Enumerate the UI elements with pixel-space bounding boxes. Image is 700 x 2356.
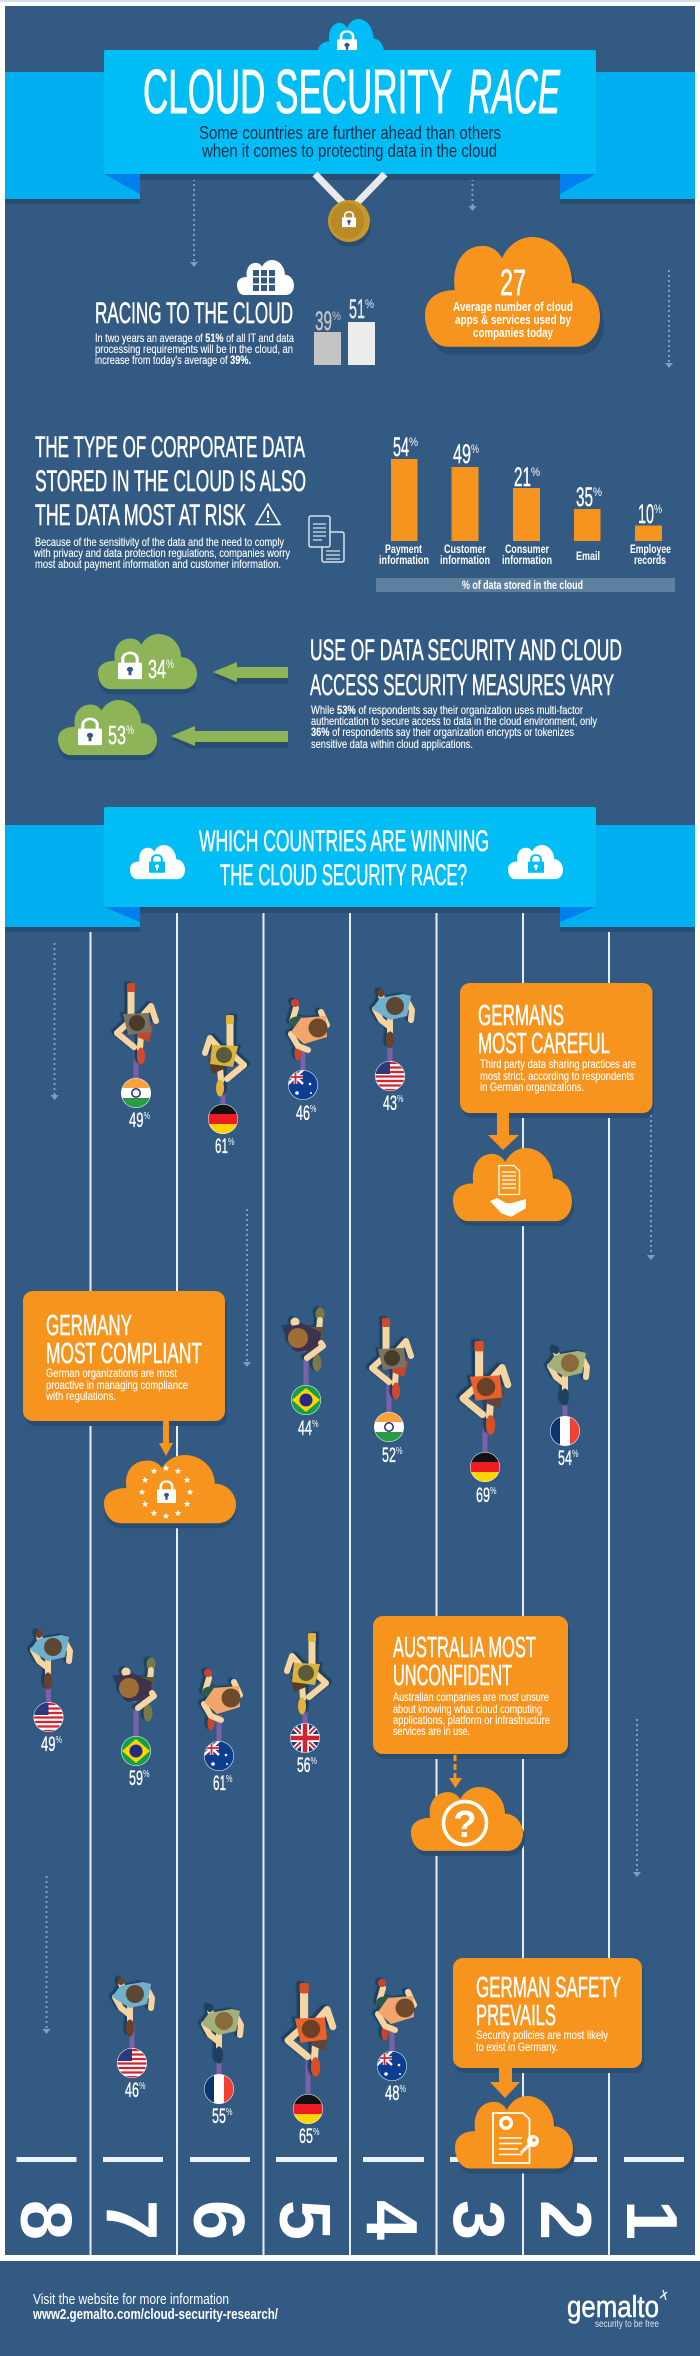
subtitle [199,123,501,161]
icon: cloud lock on banner [318,19,384,66]
lane numbers: 7 [91,2200,171,2240]
runner: Australia 61: 61 [213,1772,226,1795]
runner: USA 49 [30,1630,70,1756]
text block: Because of the sensitivity of the data and the need to comply [35,535,284,549]
bar chart: data stored: 49 [453,439,471,469]
runner: India 52: 52 [382,1444,396,1467]
callout: Germany most compliant: German organizations are most [46,1366,178,1380]
dotted arrows [42,174,673,2034]
arrow [490,2068,520,2098]
callout: German safety prevails: PREVAILS [476,2000,556,2032]
callout: Germany most compliant [23,1291,236,1528]
lane numbers: 5 [264,2200,344,2240]
footer text [32,2291,279,2323]
runner: India 49: % [144,1111,150,1122]
icon: cloud with question mark [411,1787,525,1856]
bar chart: data stored: % [409,435,418,449]
bar chart: 39 vs 51: 51 [349,294,365,324]
bar chart: data stored: % [471,442,479,456]
icon: medal [315,174,385,247]
runner: France 54: 54 [558,1447,572,1470]
runner: Australia 46: % [310,1104,317,1115]
runner: USA 46 [112,1977,152,2102]
banner: which countries [5,807,695,932]
callout: Germans most careful: in German organizations. [480,1080,584,1094]
runner: France 55 [201,2004,241,2128]
heading [310,634,622,702]
callout: Australia most unconfident: UNCONFIDENT [393,1660,512,1692]
runner: France 54 [547,1346,587,1470]
icon: green cloud 53 [58,700,157,760]
lane numbers: 8 [5,2200,85,2240]
callout: 27 average apps cloud: Average number of cloud [453,299,573,314]
bar chart: data stored: 54 [393,432,409,462]
runner: India 49: 49 [129,1109,144,1132]
callout: Australia most unconfident: services are in use. [393,1724,470,1738]
text block: authentication to secure access to data in the cloud environment, only [311,714,597,728]
chart legend [376,578,675,592]
callout: Australia most unconfident [373,1616,570,1856]
icon: cloud with question mark: ? [453,1804,477,1846]
subtitle: Some countries are further ahead than others [199,123,501,143]
runner: Germany 61: 61 [215,1135,228,1158]
runner: Australia 61: % [226,1774,233,1785]
runner: Germany 61 [205,1015,244,1158]
bar chart: data stored: information [440,553,490,567]
runner: India 52: % [396,1446,403,1457]
bar chart: data stored: % [531,465,540,479]
heading [35,431,306,532]
runner: Germany 65: % [313,2127,320,2138]
callout: Germany most compliant: proactive in managing compliance [46,1378,188,1392]
callout: Germans most careful: MOST CAREFUL [478,1028,610,1060]
footer [0,2255,700,2356]
bar chart: data stored: Payment [385,542,422,556]
heading: THE CLOUD SECURITY RACE? [220,859,467,892]
icon: left cloud lock [130,845,185,879]
bar chart: 39 vs 51: 39 [315,306,332,336]
heading: THE DATA MOST AT RISK [35,499,246,532]
bar chart: data stored [376,432,675,592]
text block: with privacy and data protection regulations, companies worry [33,546,290,560]
heading: RACING TO THE CLOUD [95,297,293,330]
lane numbers: 3 [438,2200,518,2240]
runner: Brazil 44 [284,1308,324,1440]
bar chart: data stored: % [654,502,662,516]
runner: India 49 [117,983,156,1132]
arrow: to 53 cloud [171,726,288,750]
heading: STORED IN THE CLOUD IS ALSO [35,465,306,498]
bar chart: 39 vs 51: % [365,297,374,311]
bar chart: data stored: records [634,553,666,567]
callout: 27 average apps cloud [425,237,604,355]
arrow [488,1113,519,1150]
lane numbers: 1 [611,2200,691,2240]
runner: Germany 65: 65 [299,2125,313,2148]
text block: processing requirements will be in the cloud, an [95,342,293,356]
logo: gemalto: gemalto [567,2289,659,2324]
bar chart: 39 vs 51: % [332,309,341,323]
runner: India 52 [372,1318,411,1467]
callout: Germany most compliant: GERMANY [46,1310,132,1342]
runner: USA 49: 49 [41,1733,56,1756]
text block [33,535,290,571]
runner: Germany 69: % [490,1486,497,1497]
runner: Australia 48: 48 [385,2082,400,2105]
icon: right cloud lock [508,845,563,879]
bar chart: data stored: information [502,553,552,567]
logo: gemalto: security to be free [595,2318,659,2330]
icon: green cloud 34 [98,634,197,694]
runner: USA 43 [372,989,412,1115]
bar chart: data stored: Customer [444,542,486,556]
runner: France 55: 55 [212,2105,226,2128]
chart legend: % of data stored in the cloud [462,578,583,592]
bar chart: data stored: % [593,485,602,499]
title: CLOUD SECURITY [143,58,452,127]
text block: While 53% of respondents say their organization uses multi-factor [311,703,583,717]
callout: Australia most unconfident: Australian companies are most unsure [393,1690,549,1704]
heading [199,825,489,892]
runner: Australia 48: % [400,2084,406,2095]
icon: white cloud grid [237,260,294,295]
bar chart: data stored: 35 [576,482,593,512]
heading: THE TYPE OF CORPORATE DATA [35,431,305,464]
subtitle: when it comes to protecting data in the cloud [201,141,497,161]
callout: Germans most careful: GERMANS [478,1000,564,1032]
bar chart: data stored: Consumer [505,542,549,556]
runner: Brazil 44: 44 [298,1417,312,1440]
text block: most about payment information and customer information. [35,557,281,571]
panel: security measures vary [58,634,622,760]
text block: increase from today's average of 39%. [95,353,251,367]
arrow: to 34 cloud [213,662,288,686]
callout: Australia most unconfident: about knowing what cloud computing [393,1702,542,1716]
icon: green cloud 34: 34 [148,654,166,684]
icon: cloud with certificate and key [455,2096,575,2174]
runner: Brazil 44: % [312,1419,319,1430]
icon: green cloud 34: % [166,657,174,671]
header banner [5,19,695,247]
callout: Germans most careful: Third party data sharing practices are [480,1057,636,1071]
runner: France 55: % [226,2107,233,2118]
runner: Brazil 59: % [143,1769,150,1780]
footer text: www2.gemalto.com/cloud-security-research/ [32,2306,279,2323]
icon: cloud with EU stars lock [104,1455,236,1528]
runner: USA 49: % [56,1735,62,1746]
callout: Germany most compliant: MOST COMPLIANT [46,1338,202,1370]
callout: Germans most careful [453,983,654,1226]
text block: 36% of respondents say their organization encrypts or tokenizes [311,725,574,739]
heading: WHICH COUNTRIES ARE WINNING [199,825,489,858]
callout: 27 average apps cloud: 27 [500,262,526,303]
bar chart: data stored: Email [576,549,600,563]
text block [311,703,597,751]
text block [95,331,294,367]
runner: UK 56 [287,1633,326,1777]
bar chart: data stored: 10 [638,499,654,529]
runner: Brazil 59: 59 [129,1767,143,1790]
icon: documents [309,516,344,562]
runner: Germany 61: % [228,1137,235,1148]
arrow [159,1421,173,1456]
bar chart: data stored: 21 [514,462,531,492]
bar chart: data stored: information [379,553,429,567]
runner: Germany 69 [463,1341,508,1507]
title: RACE [468,58,560,127]
runner: France 54: % [572,1449,579,1460]
runner: USA 43: 43 [383,1092,397,1115]
panel: corporate data [33,431,675,592]
bar chart: data stored: Employee [630,542,671,556]
lane numbers [5,2200,691,2240]
lane numbers: 2 [525,2200,605,2240]
runner: USA 46: 46 [125,2079,139,2102]
running track lane lines [90,905,609,2255]
footer text: Visit the website for more information [33,2291,229,2308]
runner: Brazil 59 [115,1658,156,1790]
runner: Australia 46: 46 [296,1102,310,1125]
callout: Australia most unconfident: AUSTRALIA MOST [393,1632,536,1664]
callout: Germany most compliant: with regulations. [45,1389,116,1403]
runner: Australia 48 [376,1979,414,2105]
runner: Australia 46 [288,999,328,1125]
callout: Australia most unconfident: applications, platform or infrastructure [393,1713,550,1727]
callout: Germans most careful: most strict, according to respondents [480,1069,634,1083]
runner: Australia 61 [202,1669,240,1795]
callout: 27 average apps cloud: apps & services used by [455,312,572,327]
icon: warning [256,504,280,524]
runner: USA 43: % [397,1094,404,1105]
callout: German safety prevails: Security policies are most likely [476,2028,608,2042]
bar chart: 39 vs 51 [314,294,375,365]
runner: Germany 65 [288,1983,333,2148]
icon: cloud with document in hand [453,1148,574,1226]
icon: green cloud 53: 53 [108,720,126,750]
lane numbers: 6 [178,2200,258,2240]
text block: In two years an average of 51% of all IT and data [95,331,294,345]
icon: green cloud 53: % [126,723,134,737]
callout: German safety prevails [453,1958,644,2174]
panel: racing to the cloud [95,260,375,367]
start lines [16,2157,684,2162]
runner: Germany 69: 69 [476,1484,490,1507]
text block: sensitive data within cloud applications. [311,737,473,751]
runner: USA 46: % [139,2081,146,2092]
callout: German safety prevails: to exist in Germany. [476,2040,558,2054]
lane numbers: 4 [351,2200,431,2240]
runner: UK 56: % [310,1756,317,1767]
callout: 27 average apps cloud: companies today [473,325,554,340]
arrow: dashed [449,1755,462,1788]
runner: UK 56: 56 [297,1754,310,1777]
